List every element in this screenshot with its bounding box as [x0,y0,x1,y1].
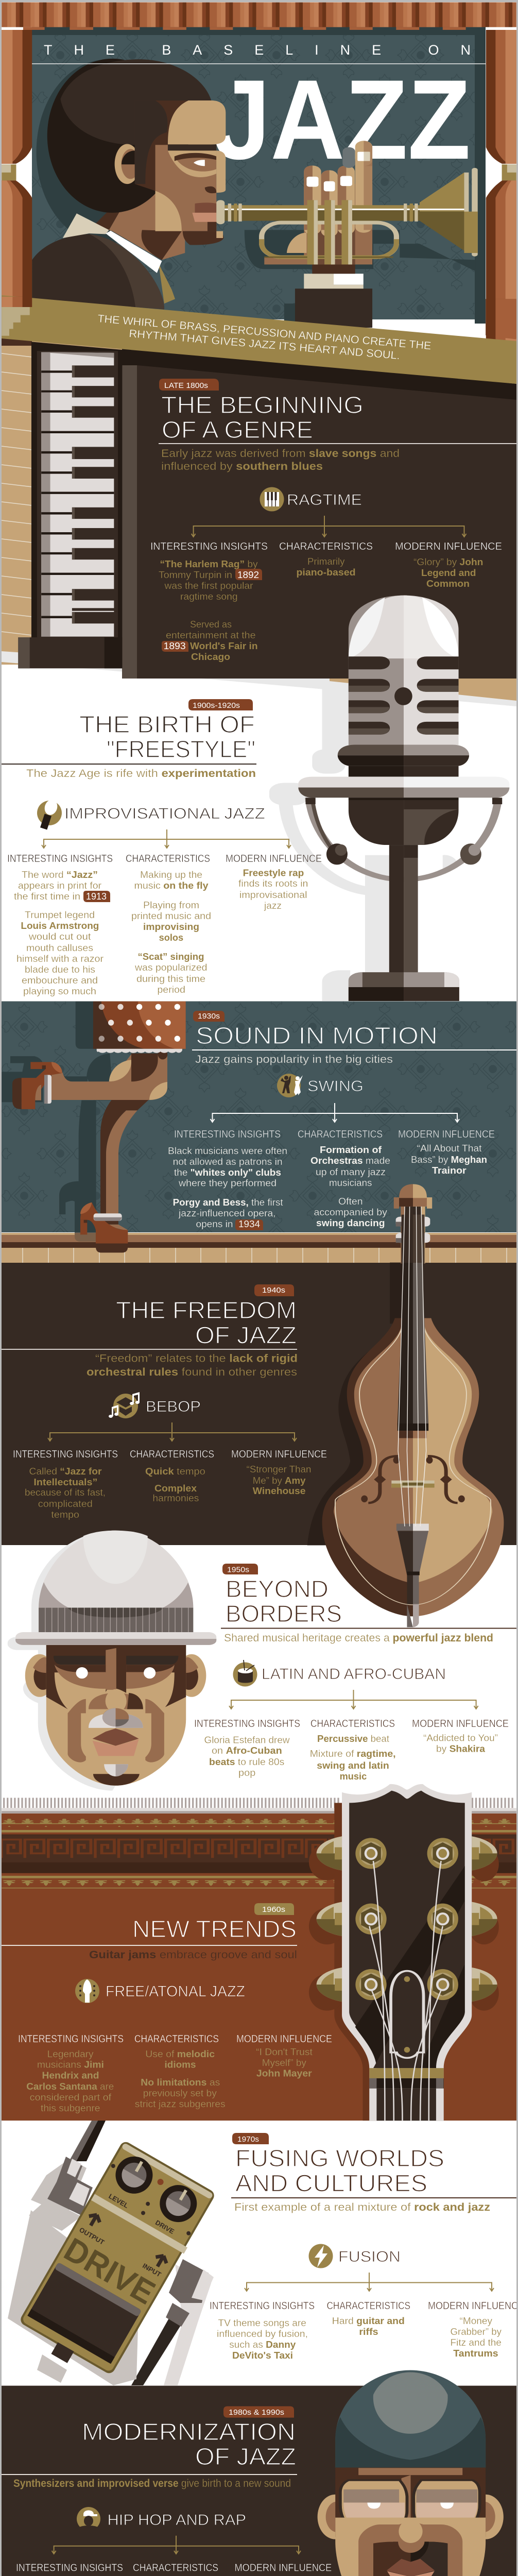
column text: such as Danny [229,2340,296,2350]
column text: No limitations as [141,2077,220,2088]
column text: pop [238,1768,255,1778]
column text: DeVito's Taxi [232,2350,293,2361]
column text: Hendrix and [42,2070,99,2080]
curtains: valance and side drapes [2,2,516,345]
column text: Tommy Turpin in [159,570,232,580]
heading: "FREESTYLE" [107,736,255,762]
heading: OF JAZZ [195,2443,296,2470]
column text: opens in [196,1219,233,1229]
column text: Grabber” by [450,2327,502,2337]
arrows [245,2273,494,2291]
column text: Quick tempo [145,1466,205,1477]
column text: himself with a razor [16,954,103,964]
column text: previously set by [143,2088,217,2098]
heading [2,1297,297,1350]
column text: Myself” by [262,2058,306,2068]
column text: accompanied by [314,1207,387,1217]
column text: World's Fair in [190,641,257,651]
column text: musicians [329,1178,372,1188]
column text: up of many jazz [316,1167,386,1177]
column text: the "whites only" clubs [174,1167,281,1178]
column headers: MODERN INFLUENCE [226,853,322,865]
column headers: INTERESTING INSIGHTS [16,2563,123,2574]
heading: AND CULTURES [235,2170,427,2197]
column text: Legendary [47,2049,94,2059]
intro: Shared musical heritage creates a powerful jazz blend [224,1632,493,1644]
heading [2,711,256,765]
intro [87,1353,298,1378]
column headers: INTERESTING INSIGHTS [210,2300,315,2312]
column text [168,1143,487,1230]
column text: “All About That [417,1143,482,1154]
forehead and finger over JAZZ letters [188,100,372,168]
arrows [48,1422,297,1441]
arrows [42,829,291,848]
icon: lightning bolt [309,2244,333,2268]
column headers [150,541,502,552]
column text: improvisational [239,890,307,900]
intro: Guitar jams embrace groove and soul [89,1949,297,1961]
banner text: THE WHIRL OF BRASS, PERCUSSION AND PIANO CREATE THE [97,313,431,352]
column text: music [340,1771,367,1782]
arrows [229,1690,478,1709]
heading: BORDERS [226,1600,342,1627]
column text: on Afro-Cuban [212,1745,282,1756]
column text: 1934 [238,1219,260,1229]
genre title: IMPROVISATIONAL JAZZ [64,805,265,822]
column text [25,1464,311,1520]
column headers [210,2300,518,2312]
column text [204,1733,498,1782]
column text: playing so much [23,986,96,996]
column headers: MODERN INFLUENCE [231,1449,327,1460]
column text: Often [338,1196,362,1207]
pedal labels [78,2188,184,2279]
panel: tan wall left of piano [2,335,122,665]
date pill: 1930s [198,1012,220,1021]
heading: FUSING WORLDS [235,2145,444,2172]
column text: John Mayer [256,2068,312,2078]
column text: considered part of [30,2092,112,2103]
column text: Primarily [307,556,345,567]
intro: Jazz gains popularity in the big cities [195,1054,393,1065]
intro: Early jazz was derived from slave songs and [161,448,400,460]
icon: microphone [37,798,62,829]
column text: entertainment at the [166,630,255,640]
column headers [194,1718,509,1730]
column text: “Addicted to You” [423,1733,498,1743]
column text: during this time [136,974,205,984]
illustration: vintage microphone [269,596,509,1001]
heading [221,1575,516,1629]
date pill [232,2133,269,2144]
column text: music on the fly [134,880,208,891]
column text: Carlos Santana are [26,2081,114,2092]
column headers: MODERN INFLUENCE [236,2033,332,2045]
column text: “The Harlem Rag” by [160,559,257,569]
column text: “Money [459,2316,492,2326]
column headers: CHARACTERISTICS [133,2563,218,2574]
column text: Fitz and the [450,2337,502,2348]
intro: Synthesizers and improvised verse give birth to a new sound [13,2478,291,2489]
icon: guitar headstock [75,1979,99,2003]
column text: swing dancing [316,1218,385,1228]
column text: 1913 [86,891,107,902]
column text: 1893 [164,641,186,651]
arrows [52,2536,301,2554]
column text: Mixture of ragtime, [310,1749,396,1759]
column text: Complex [154,1483,197,1494]
column headers: CHARACTERISTICS [298,1129,383,1140]
heading: THE FREEDOM [116,1297,297,1324]
illustration: guitar headstock [309,1784,499,2121]
column text: Chicago [191,652,230,662]
column text: jazz-influenced opera, [178,1208,276,1218]
panel: beginning of a genre [122,343,516,679]
column headers: CHARACTERISTICS [134,2033,219,2045]
panel: gold banner [2,295,516,384]
column text: Black musicians were often [168,1146,287,1156]
genre title: HIP HOP AND RAP [107,2512,246,2529]
column text: Playing from [143,900,199,910]
date pill: 1940s [262,1286,285,1295]
section text: sound in motion [168,1011,516,1230]
date pill: 1960s [262,1905,285,1914]
column text: Me” by Amy [253,1476,305,1486]
column text: “I Don't Trust [256,2047,313,2057]
fringe and ornamental frieze [2,1798,516,1888]
column text: Gloria Estefan drew [204,1735,290,1745]
column text: strict jazz subgenres [135,2099,226,2109]
icon: piano keys [260,487,284,511]
big label: DRIVE [58,2230,161,2312]
column text: “Scat” singing [138,952,204,962]
section text: new trends [2,1903,332,2113]
column text: “Glory” by John [413,557,483,567]
column text: jazz [264,901,282,911]
column text: Trumpet legend [25,910,95,920]
column text: tempo [51,1510,79,1520]
column text: because of its fast, [25,1487,106,1498]
panel: dark modern section [2,2386,516,2576]
column text: Percussive beat [317,1734,389,1744]
column text: the first time in [14,891,80,902]
section text: beyond borders [194,1564,516,1782]
intro: “Freedom” relates to the lack of rigid [95,1353,298,1364]
banner text: RHYTHM THAT GIVES JAZZ ITS HEART AND SOUL. [129,328,401,362]
date pill: 1900s-1920s [193,701,240,710]
date pill [222,1564,258,1574]
arrows [210,1103,459,1122]
date pill [159,379,219,391]
column headers [16,2563,332,2574]
date pill [188,699,253,710]
section text: modernization of jazz [2,2406,332,2576]
column text: not allowed as patrons in [173,1157,283,1167]
intro: orchestral rules found in other genres [87,1366,297,1378]
date pill: 1970s [237,2135,259,2144]
column text: appears in print for [18,880,101,891]
column headers: INTERESTING INSIGHTS [174,1129,281,1140]
column text: Called “Jazz for [29,1466,102,1477]
illustration: jazz trumpeter portrait [32,59,478,328]
date pill [254,1903,294,1915]
column headers: INTERESTING INSIGHTS [7,853,113,865]
column text [159,556,483,662]
illustration: hat man portrait [8,1531,216,1791]
column text: Louis Armstrong [21,921,99,931]
genre title: BEBOP [146,1398,201,1415]
date pill [223,2406,294,2418]
column headers: MODERN INFLUENCE [412,1718,509,1730]
column text: solos [159,933,183,943]
column headers: INTERESTING INSIGHTS [194,1718,300,1730]
column headers: CHARACTERISTICS [126,853,210,865]
tan wedge under section one [330,679,516,701]
column text: idioms [165,2060,196,2070]
icon: cap and beard [77,2507,100,2532]
column text: musicians Jimi [37,2060,104,2070]
column text: Tantrums [453,2348,498,2359]
date pill [193,1011,225,1022]
column headers: CHARACTERISTICS [326,2300,410,2312]
column text: Making up the [140,870,202,880]
pedal labels: DRIVE [154,2218,176,2235]
column headers: CHARACTERISTICS [130,1449,214,1460]
column text: The word “Jazz” [22,870,98,880]
icon: swing dancers [277,1074,303,1097]
column text: Freestyle rap [243,868,304,878]
date pill: 1950s [227,1566,249,1574]
date pill [254,1284,294,1296]
column text: 1892 [237,570,259,580]
column text: Served as [190,619,232,630]
column text [14,868,308,996]
pedal labels: LEVEL [107,2192,130,2210]
column text: “Stronger Than [247,1464,311,1475]
wall shadow under valance [32,26,486,324]
column text: Porgy and Bess, the first [173,1197,283,1208]
panel: teal wall section three [2,1002,516,1263]
column text: complicated [38,1499,93,1509]
column headers: MODERN INFLUENCE [395,541,502,552]
genre title: SWING [307,1078,364,1095]
date pill: 1980s & 1990s [229,2408,284,2417]
column text [26,2047,313,2113]
column text: period [157,985,185,995]
illustration: piano keyboard [18,342,122,668]
pedal labels: INPUT [141,2262,163,2278]
column text: blade due to his [25,964,95,975]
heading [231,2145,516,2198]
column text: finds its roots in [238,878,308,889]
pedal labels: OUTPUT [78,2226,106,2246]
column text: ragtime song [180,591,238,602]
arrows [192,516,467,537]
column headers [18,2033,332,2045]
column text: piano-based [297,567,355,578]
column text: this subgenre [41,2103,100,2113]
column text: Common [426,579,470,589]
curtain overlap on banner [2,297,516,339]
column text [217,2316,502,2361]
column text: riffs [359,2327,378,2337]
illustration: dancer leg and skirt [2,1002,186,1252]
heading: MODERNIZATION [82,2418,296,2445]
column headers: INTERESTING INSIGHTS [150,541,268,552]
column headers: CHARACTERISTICS [279,541,373,552]
section text: the beginning of a genre [150,379,516,662]
column text: was the first popular [164,581,253,591]
intro: influenced by southern blues [161,461,323,472]
illustration: beanie man with chain [318,2370,504,2576]
genre title: FUSION [338,2248,401,2265]
column headers [7,853,322,865]
title: The Baseline On: THE BASELINE ON [44,42,471,58]
heading: OF JAZZ [195,1322,297,1349]
heading: NEW TRENDS [132,1916,297,1942]
column headers: INTERESTING INSIGHTS [18,2033,124,2045]
column text: Orchestras made [310,1156,390,1166]
column text: Formation of [320,1145,382,1155]
column text: TV theme songs are [218,2318,306,2328]
genre title: RAGTIME [287,492,362,509]
title: JAZZ: JAZZ [213,56,471,183]
intro [161,448,400,472]
icon: graduation cap and notes [109,1392,140,1418]
heading: SOUND IN MOTION [196,1022,438,1049]
grey floor shadow [2,651,516,706]
illustration: overdrive pedal [8,2121,218,2386]
panel: dark section freedom [2,1263,516,1545]
column headers: MODERN INFLUENCE [235,2563,332,2574]
column text: mouth calluses [26,943,93,953]
genre title: LATIN AND AFRO-CUBAN [262,1666,446,1683]
heading [159,392,516,444]
column text: was popularized [134,962,207,973]
column headers [174,1129,495,1140]
column text: by Shakira [436,1743,486,1754]
section text: fusing worlds and cultures [210,2133,518,2361]
column text: Legend and [421,568,476,578]
column text: printed music and [131,911,211,921]
column text: Use of melodic [145,2049,215,2059]
icon: drum [233,1660,257,1687]
heading [2,2418,297,2475]
panel: header wall with wallpaper [32,26,486,319]
column text: beats to rule 80s [209,1757,284,1767]
column text: Trainor [432,1165,467,1176]
date pill: LATE 1800s [164,381,208,390]
heading: THE BEGINNING [161,392,364,418]
column text: improvising [143,922,199,932]
column text: Hard guitar and [332,2316,405,2326]
section text: the birth of freestyle [2,699,322,996]
column text: harmonies [152,1493,199,1503]
column text: Winehouse [253,1486,306,1496]
intro: The Jazz Age is rife with experimentation [26,768,256,779]
panel: rust section new trends [2,1814,516,2121]
column headers: CHARACTERISTICS [310,1718,395,1730]
intro: First example of a real mixture of rock and jazz [234,2201,490,2213]
heading: THE BIRTH OF [79,711,255,738]
column text: embouchure and [22,975,98,986]
column text: Intellectuals” [33,1477,97,1487]
column text: Bass” by Meghan [411,1155,487,1165]
heading: BEYOND [226,1575,329,1602]
column headers: INTERESTING INSIGHTS [13,1449,118,1460]
column text: influenced by fusion, [217,2329,308,2339]
section text: the freedom of jazz [2,1284,327,1520]
genre title: FREE/ATONAL JAZZ [106,1983,245,2000]
illustration: double bass [307,1184,504,1627]
heading: OF A GENRE [162,416,313,443]
column text: would cut out [28,931,91,942]
column headers: MODERN INFLUENCE [398,1129,495,1140]
column headers [13,1449,327,1460]
column text: swing and latin [317,1760,389,1771]
column text: where they performed [178,1178,277,1188]
